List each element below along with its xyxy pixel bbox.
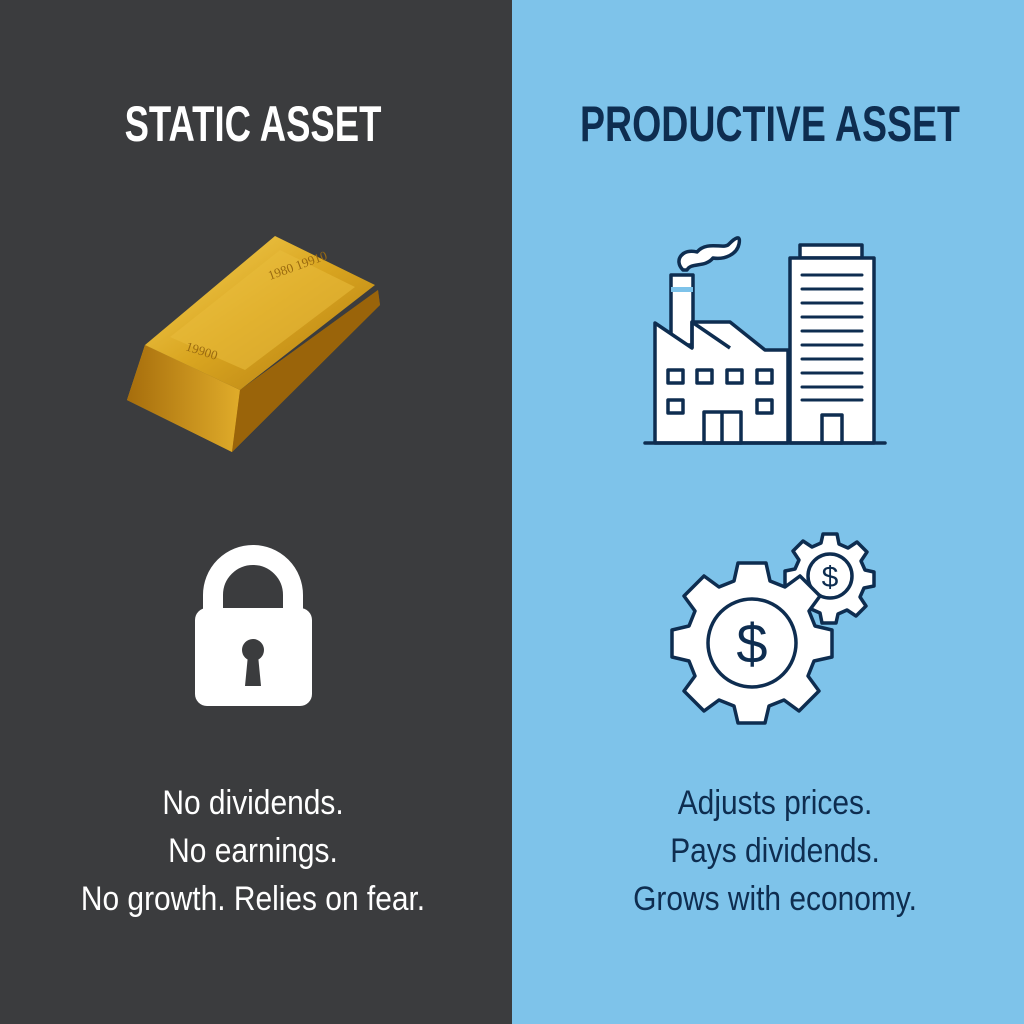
- icon: gold bar: [127, 236, 380, 452]
- text: static description: No growth. Relies on fear.: [81, 880, 425, 918]
- text: static description: [81, 784, 425, 918]
- icon: gears with dollar: $: [736, 612, 768, 675]
- title: static asset: STATIC ASSET: [125, 96, 381, 152]
- text: productive description: Adjusts prices.: [678, 784, 872, 822]
- icon: padlock: [195, 555, 312, 706]
- text: productive description: Pays dividends.: [670, 832, 880, 870]
- icon: factory and tower: [645, 238, 885, 443]
- icon: gold bar: 19900: [184, 339, 220, 363]
- icon: gears with dollar: $: [822, 561, 839, 594]
- icon: gears with dollar: [672, 534, 874, 723]
- text: productive description: Grows with economy.: [633, 880, 917, 918]
- text: static description: No dividends.: [162, 784, 344, 822]
- panel: productive asset: [512, 0, 1024, 1024]
- panel: static asset: [0, 0, 512, 1024]
- text: productive description: [633, 784, 917, 918]
- icon: gold bar: 1980 19910: [266, 248, 329, 283]
- title: productive asset: PRODUCTIVE ASSET: [580, 96, 960, 152]
- text: static description: No earnings.: [168, 832, 338, 870]
